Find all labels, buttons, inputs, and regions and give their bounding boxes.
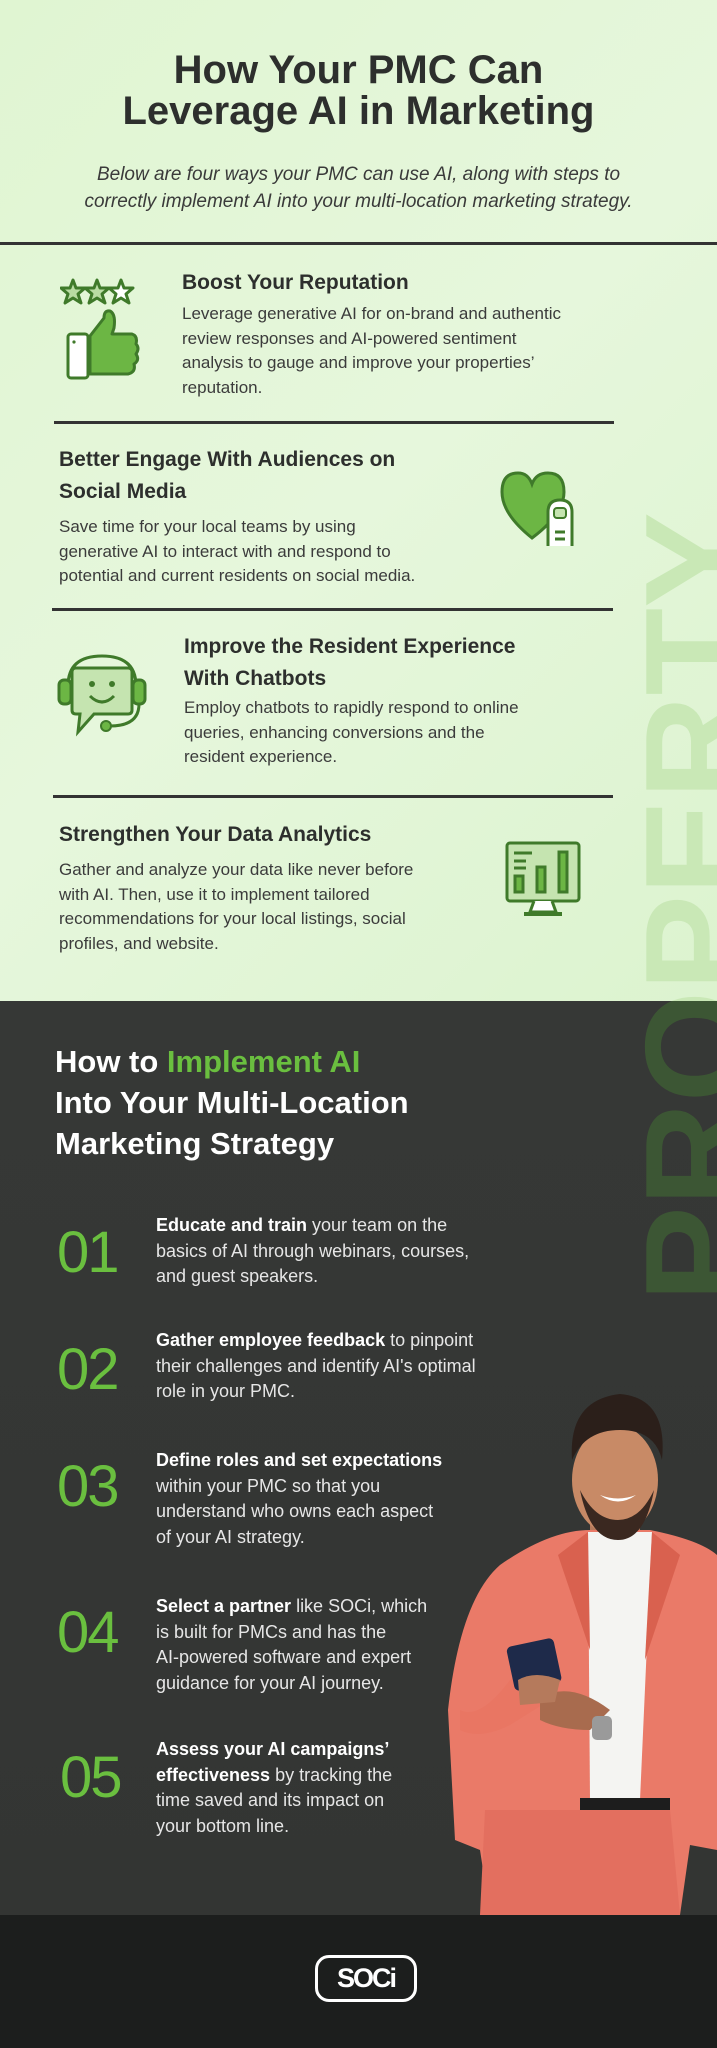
step 05 — [60, 1739, 392, 1836]
step 02 — [57, 1330, 476, 1402]
section: chatbots — [184, 635, 519, 766]
title: How Your PMC Can — [174, 48, 543, 92]
section: boost reputation: Leverage generative AI for on-brand and authentic — [182, 304, 561, 323]
section: social media: Save time for your local teams by using — [59, 517, 356, 536]
section: chatbots: Employ chatbots to rapidly respond to online — [184, 698, 519, 717]
step 02: role in your PMC. — [156, 1381, 295, 1401]
step 05: effectiveness by tracking the — [156, 1765, 392, 1785]
step 01 — [57, 1215, 469, 1286]
section: data analytics: with AI. Then, use it to implement tailored — [59, 885, 370, 904]
step 03: 03 — [57, 1454, 118, 1519]
section: data analytics: recommendations for your local listings, social — [59, 909, 406, 928]
step 01: 01 — [57, 1220, 118, 1285]
heading: how to implement AI: How to Implement AI — [55, 1044, 360, 1079]
title — [122, 48, 594, 133]
step 03: understand who owns each aspect — [156, 1501, 433, 1521]
step 01: Educate and train your team on the — [156, 1215, 447, 1235]
section: social media: Better Engage With Audiences on — [59, 448, 395, 471]
step 01: basics of AI through webinars, courses, — [156, 1240, 469, 1260]
section: data analytics: Strengthen Your Data Analytics — [59, 823, 371, 846]
footer background — [0, 1915, 717, 2048]
step 04: is built for PMCs and has the — [156, 1622, 386, 1642]
icon: heart with finger — [500, 472, 574, 546]
section: social media: generative AI to interact with and respond to — [59, 542, 391, 561]
logo: SOCi — [315, 1955, 417, 2002]
section: social media: potential and current residents on social media. — [59, 566, 415, 585]
heading: how to implement AI: Marketing Strategy — [55, 1126, 334, 1161]
section: data analytics: Gather and analyze your data like never before — [59, 860, 413, 879]
dark panel background — [0, 1001, 717, 1915]
section: boost reputation: Boost Your Reputation — [182, 271, 409, 294]
section: chatbots: resident experience. — [184, 747, 337, 766]
step 05: time saved and its impact on — [156, 1790, 384, 1810]
section: chatbots: Improve the Resident Experience — [184, 635, 515, 658]
step 03: of your AI strategy. — [156, 1526, 305, 1546]
section: social media — [59, 448, 415, 585]
section: boost reputation: analysis to gauge and improve your properties’ — [182, 353, 534, 372]
section: data analytics — [59, 823, 413, 953]
step 03: Define roles and set expectations — [156, 1450, 442, 1470]
subtitle: correctly implement AI into your multi-location marketing strategy. — [84, 191, 633, 212]
section: data analytics: profiles, and website. — [59, 934, 219, 953]
step 03: within your PMC so that you — [156, 1476, 380, 1496]
step 01: and guest speakers. — [156, 1266, 318, 1286]
logo: SOCi: SOCi — [337, 1963, 395, 1993]
subtitle: Below are four ways your PMC can use AI, along with steps to — [97, 164, 620, 185]
step 02: 02 — [57, 1337, 118, 1402]
section: boost reputation: reputation. — [182, 378, 262, 397]
step 05: Assess your AI campaigns’ — [156, 1739, 389, 1759]
top light panel background — [0, 0, 717, 1001]
step 04: AI-powered software and expert — [156, 1647, 411, 1667]
icon: stars and thumbs up — [60, 278, 140, 380]
section: chatbots: With Chatbots — [184, 667, 326, 690]
step 04: guidance for your AI journey. — [156, 1672, 384, 1692]
section: chatbots: queries, enhancing conversions and the — [184, 723, 485, 742]
title: Leverage AI in Marketing — [122, 89, 594, 133]
subtitle — [84, 164, 633, 212]
icon: monitor with bar chart — [506, 842, 580, 916]
text: Gather employee feedback to pinpoint — [156, 1330, 473, 1350]
step 04 — [57, 1596, 427, 1693]
icon: chatbot with headset — [58, 654, 146, 736]
illustration: smiling man in coral suit with phone — [448, 1394, 717, 1915]
step 04: 04 — [57, 1600, 118, 1665]
step 05: 05 — [60, 1745, 121, 1810]
section: social media: Social Media — [59, 480, 186, 503]
step 04: Select a partner like SOCi, which — [156, 1596, 427, 1616]
section: boost reputation — [182, 271, 561, 397]
heading: how to implement AI — [55, 1044, 409, 1161]
step 03 — [57, 1450, 442, 1547]
heading: how to implement AI: Into Your Multi-Location — [55, 1085, 409, 1120]
section: boost reputation: review responses and AI-powered sentiment — [182, 329, 517, 348]
step 02: their challenges and identify AI's optimal — [156, 1356, 476, 1376]
step 05: your bottom line. — [156, 1816, 289, 1836]
